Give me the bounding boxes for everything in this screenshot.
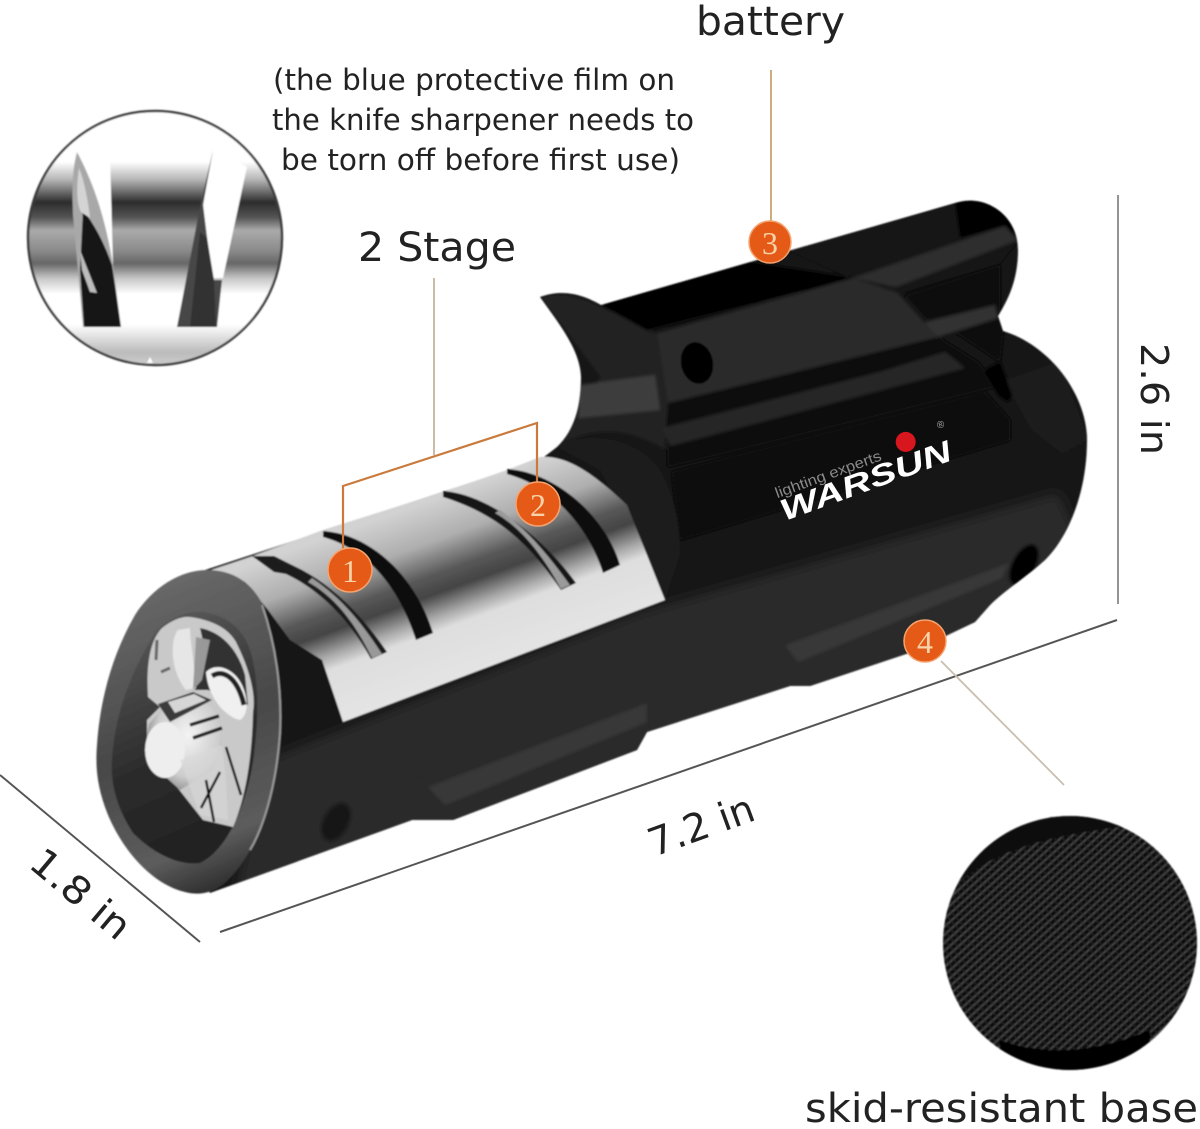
rim highlight	[250, 605, 280, 850]
marker 3: 3	[762, 225, 778, 261]
leader line: battery to marker 3	[770, 70, 772, 224]
upper tube highlight	[790, 202, 1018, 295]
dimension label: 2.6 in: 2.6 in	[1132, 343, 1176, 455]
inset circle: sharpening slot close-up	[28, 111, 282, 365]
dimension line: height	[1117, 195, 1119, 604]
brand logo: WARSUN: WARSUN	[776, 435, 958, 528]
steel reflector	[145, 617, 254, 827]
sharpening slot 4 (coarse)	[507, 469, 620, 573]
end cap shade	[955, 201, 1018, 240]
marker 4: 4	[917, 624, 933, 660]
body silhouette	[170, 201, 1087, 893]
marker 2: 2	[530, 487, 546, 523]
marker 4	[904, 620, 946, 662]
steel strip	[208, 457, 665, 722]
leader line: 2 Stage to bracket	[433, 278, 435, 455]
heading: 2 Stage: 2 Stage	[358, 225, 516, 271]
brand logo: WARSUN	[770, 418, 960, 528]
fin flank	[540, 294, 668, 450]
heading: battery: battery	[696, 0, 845, 45]
marker 3	[749, 221, 791, 263]
marker 2	[516, 482, 560, 526]
notch shadow	[905, 265, 1003, 362]
dimension line: width	[0, 775, 200, 942]
text block: protective film note: (the blue protective film on	[273, 63, 675, 97]
lower body shade	[237, 494, 1070, 882]
front side hole	[322, 804, 350, 840]
dimension label: 7.2 in: 7.2 in	[642, 786, 761, 866]
sharpening slot 1 (fine)	[252, 556, 387, 659]
marker 1	[328, 548, 372, 592]
text block: protective film note: be torn off before first use)	[281, 143, 680, 177]
marker 1: 1	[342, 553, 358, 589]
dark stripe	[668, 337, 994, 467]
sharpening slot 3 (fine)	[443, 491, 576, 590]
dimension line: length	[220, 620, 1117, 932]
text block: protective film note	[272, 63, 694, 177]
glossy band on cylinder	[672, 392, 1010, 540]
hole in flat	[677, 339, 717, 387]
notch sliver	[985, 362, 1012, 402]
rounded shoulder behind strip	[557, 438, 680, 600]
rear side hole	[1008, 544, 1039, 586]
sharpening slot 2 (coarse)	[323, 531, 433, 640]
inset circle: skid-resistant base texture	[942, 814, 1198, 1072]
rear foot	[785, 563, 1009, 686]
product: knife sharpener	[96, 201, 1090, 910]
upper flat band	[657, 278, 938, 403]
text block: protective film note: the knife sharpener needs to	[272, 103, 694, 137]
brand logo: WARSUN: lighting experts	[773, 448, 884, 502]
centre lens	[147, 690, 222, 790]
front foot	[412, 703, 647, 820]
leader line: marker 4 to base	[941, 661, 1064, 785]
front well	[112, 612, 257, 863]
bracket: stage 1 and 2	[343, 423, 537, 552]
top black face	[601, 262, 853, 330]
dimension label: 1.8 in: 1.8 in	[21, 839, 140, 949]
front face	[96, 570, 280, 894]
brand logo: WARSUN: ®	[936, 419, 947, 432]
